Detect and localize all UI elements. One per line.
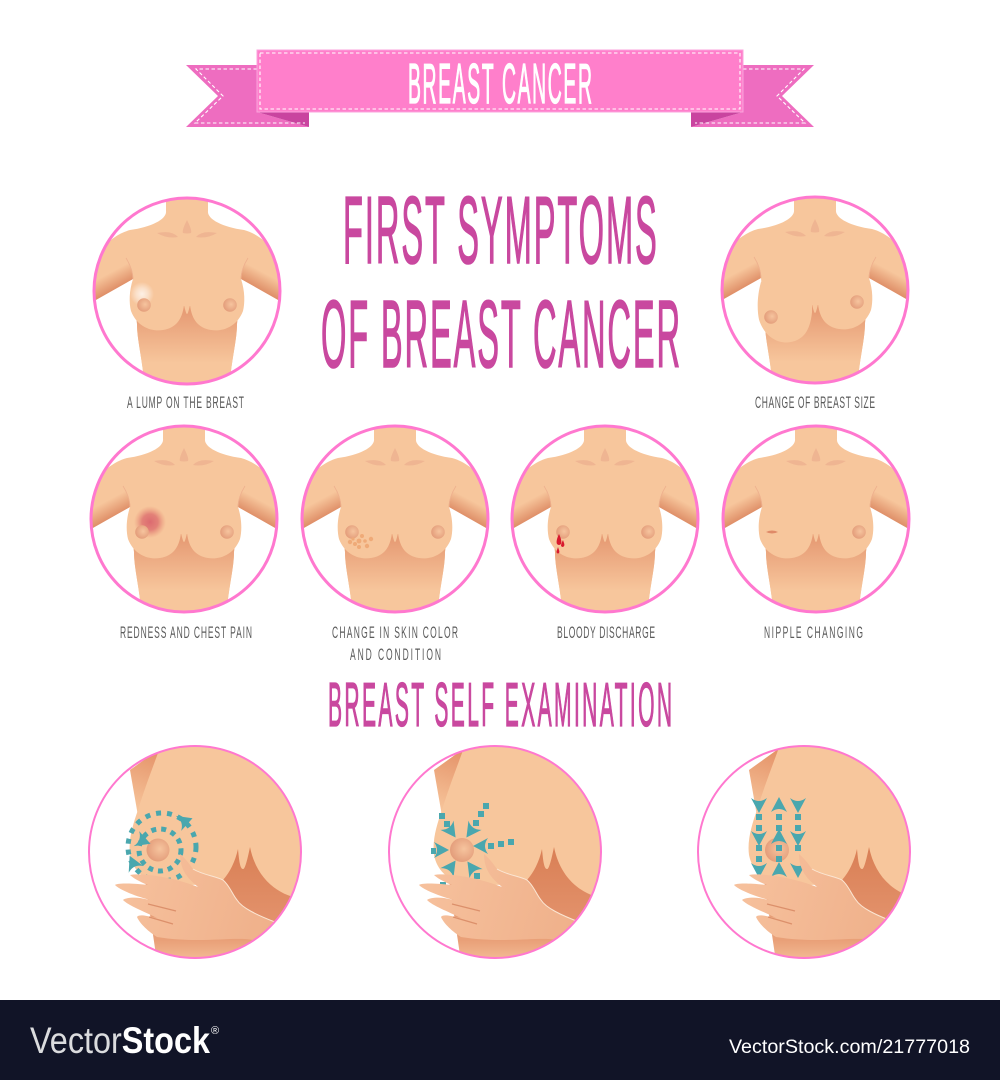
label: a lump on the breast: A LUMP ON THE BREAST	[127, 393, 244, 412]
circular dashed arrows	[122, 811, 196, 881]
exam step: vertical pattern	[697, 745, 911, 959]
ribbon banner	[186, 50, 814, 127]
main heading: FIRST SYMPTOMS	[343, 177, 657, 284]
label: change of breast size: CHANGE OF BREAST SIZE	[755, 393, 875, 412]
footer logo: ®	[211, 1025, 219, 1037]
ribbon left tail	[186, 65, 309, 127]
label: redness and chest pain: REDNESS AND CHEST PAIN	[120, 623, 252, 642]
label: nipple changing: NIPPLE CHANGING	[764, 623, 863, 642]
symptom: change of breast size	[720, 196, 910, 384]
main heading: OF BREAST CANCER	[321, 281, 680, 388]
radial dashed arrows	[431, 803, 514, 888]
exam step: circular pattern	[89, 742, 320, 962]
symptom: nipple changing	[722, 424, 910, 614]
symptom: bloody discharge	[510, 424, 700, 614]
ribbon title: BREAST CANCER	[408, 52, 592, 116]
footer image id: VectorStock.com/21777018	[729, 1036, 970, 1058]
label: change in skin color and condition: AND CONDITION	[350, 645, 441, 664]
vertical dashed arrows	[751, 797, 806, 878]
symptom: change in skin color and condition	[300, 424, 490, 614]
symptom: a lump on the breast	[92, 196, 282, 386]
label: change in skin color and condition	[332, 623, 458, 664]
main heading	[321, 177, 680, 388]
footer logo: VectorStock	[30, 1020, 210, 1061]
section heading: breast self examination: BREAST SELF EXAMINATION	[328, 670, 672, 739]
label: change in skin color and condition: CHANGE IN SKIN COLOR	[332, 623, 458, 642]
footer bar	[0, 1000, 1000, 1080]
ribbon right tail	[691, 65, 814, 127]
ribbon main band	[257, 50, 743, 112]
exam step: radial pattern	[388, 745, 602, 959]
symptom: redness and chest pain	[90, 424, 278, 614]
label: bloody discharge: BLOODY DISCHARGE	[557, 623, 655, 642]
